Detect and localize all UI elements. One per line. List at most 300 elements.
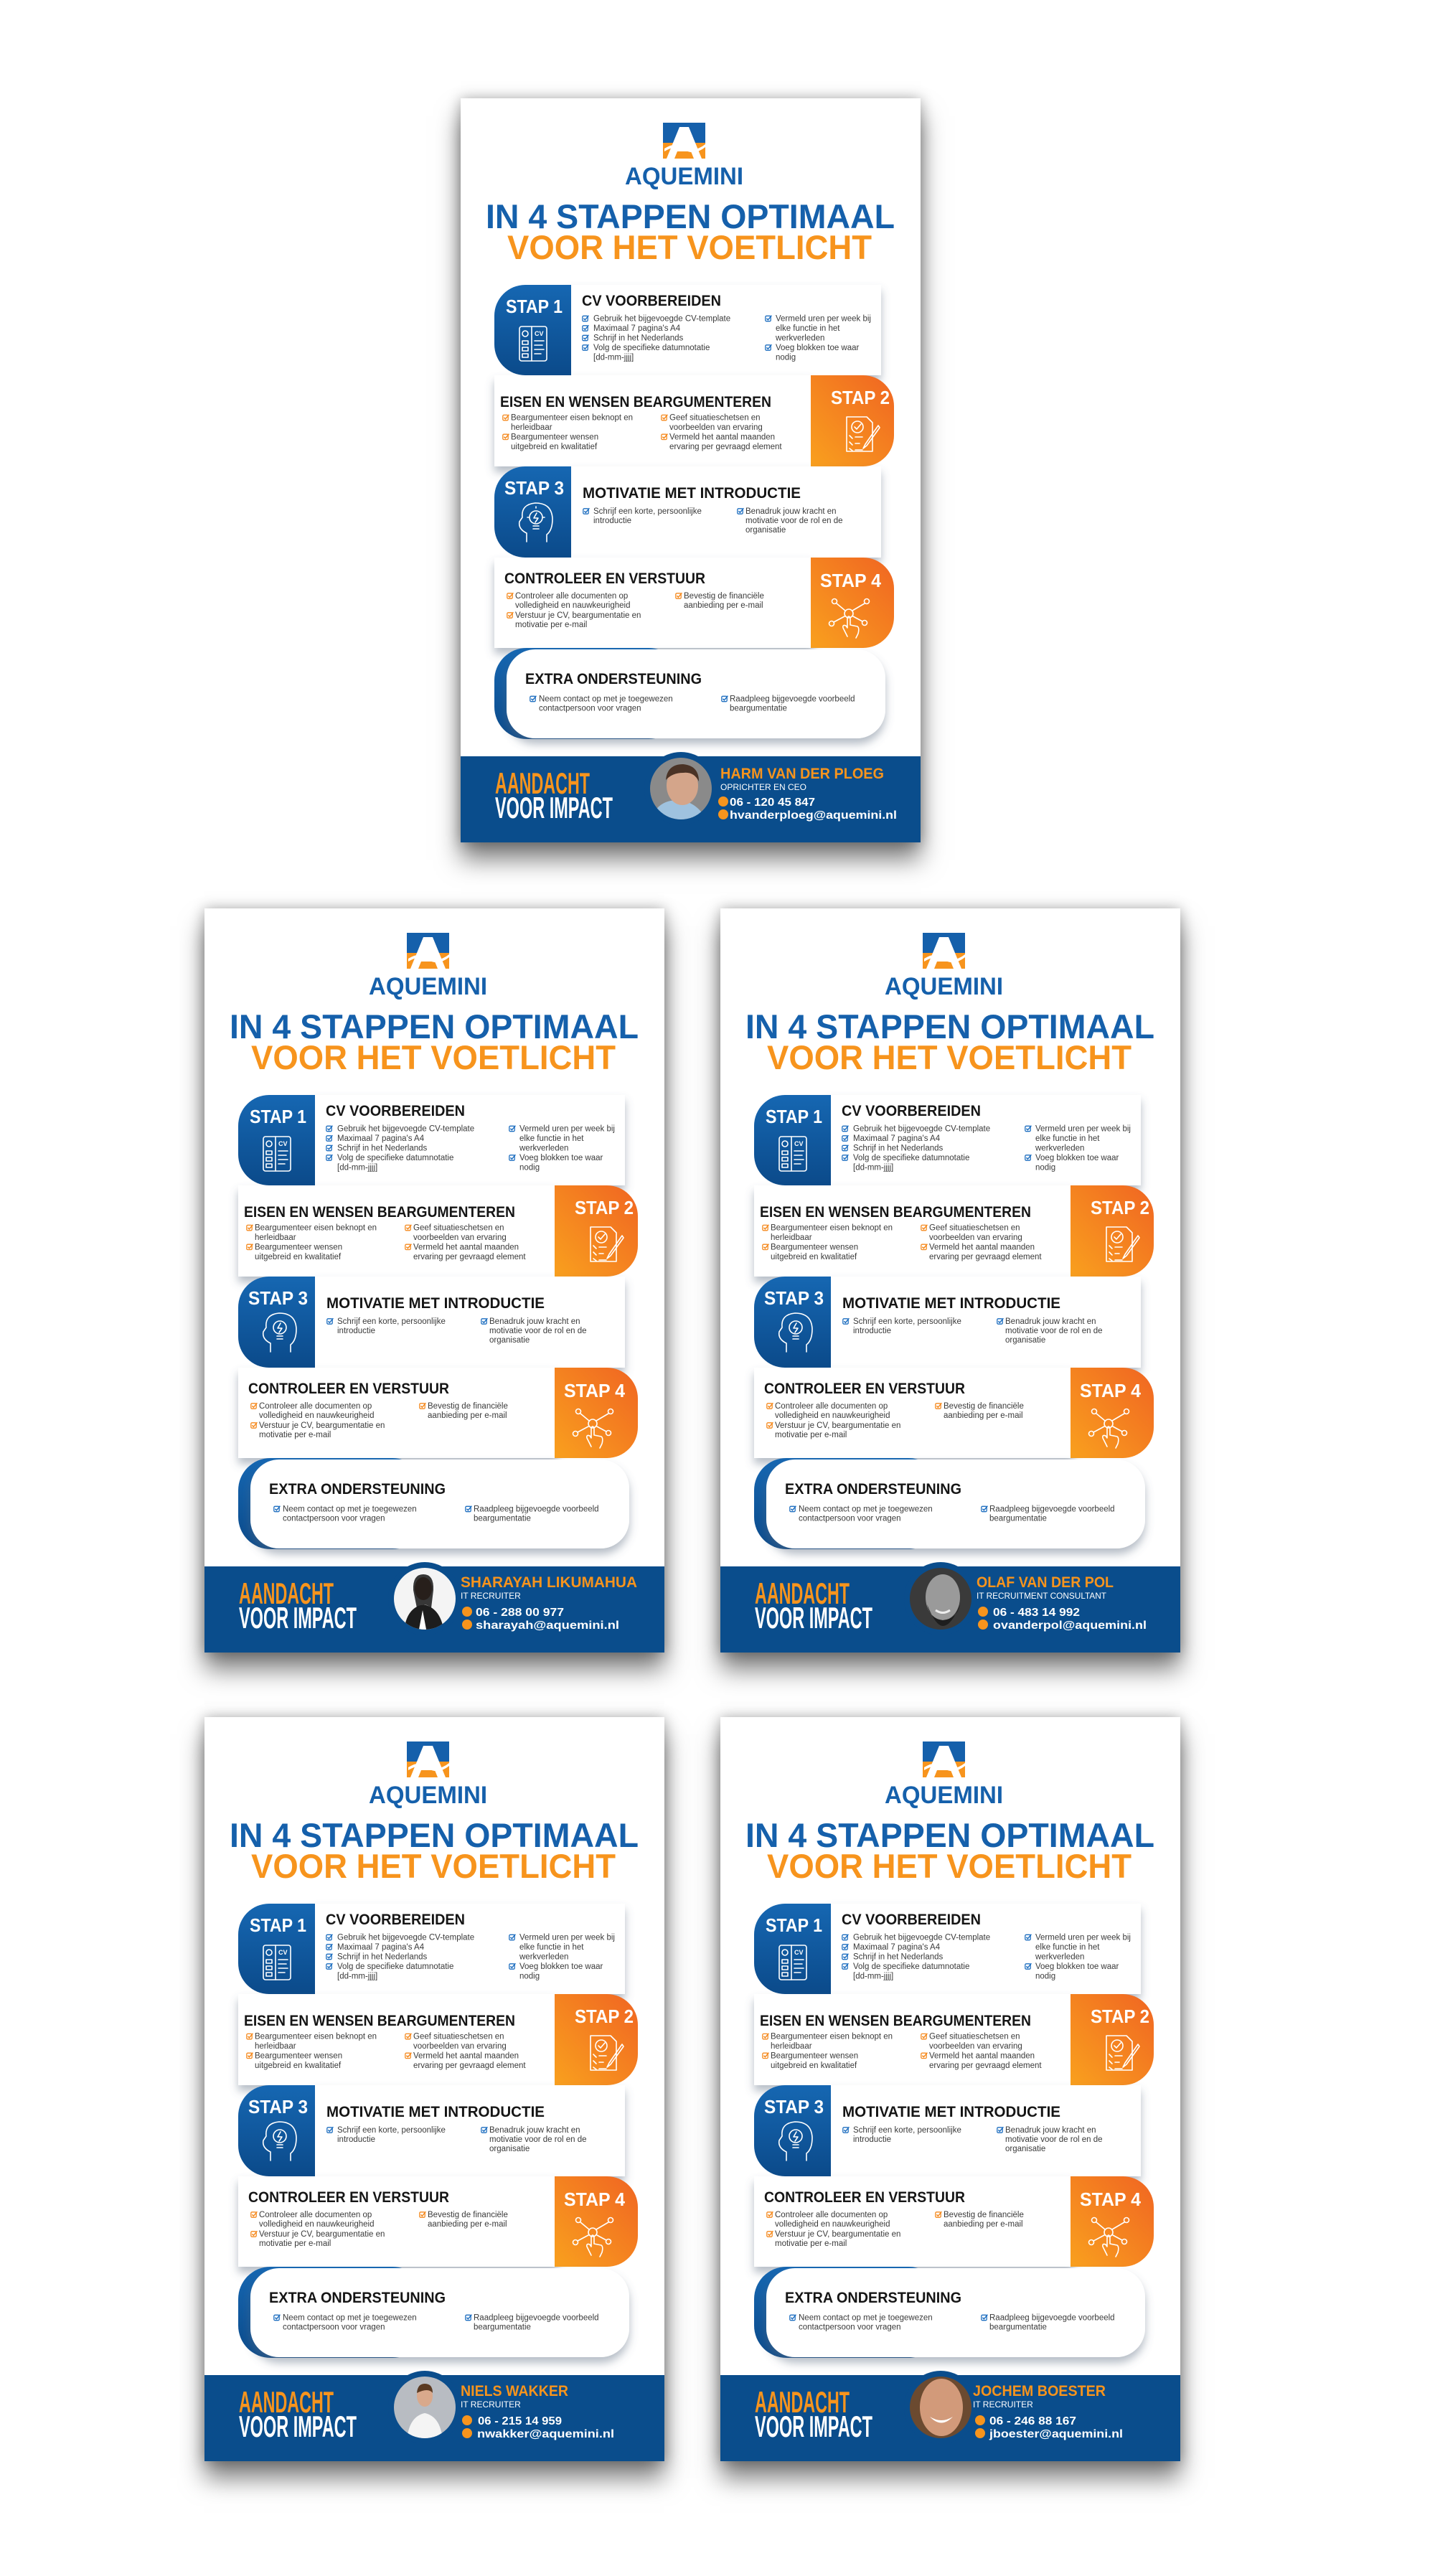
title: VOOR HET VOETLICHT <box>767 1847 1131 1885</box>
panel: stap 4: volledigheid en nauwkeurigheid <box>259 2220 374 2229</box>
panel: stap 2: Vermeld het aantal maanden <box>929 2051 1035 2060</box>
poster 5: Jochem Boester <box>720 1717 1180 2461</box>
panel: stap 2: ervaring per gevraagd element <box>929 2062 1042 2070</box>
panel: extra ondersteuning: EXTRA ONDERSTEUNING <box>269 1481 446 1498</box>
panel: stap 1: Vermeld uren per week bij <box>1035 1125 1131 1134</box>
panel: stap 3: MOTIVATIE MET INTRODUCTIE <box>842 2104 1060 2120</box>
panel: stap 2: herleidbaar <box>771 2042 812 2051</box>
panel: extra ondersteuning: contactpersoon voor vragen <box>539 705 641 713</box>
panel: stap 4: volledigheid en nauwkeurigheid <box>259 1411 374 1420</box>
footer <box>720 2371 1180 2461</box>
panel: stap 1: Gebruik het bijgevoegde CV-template <box>337 1933 474 1942</box>
footer: jboester@aquemini.nl <box>989 2428 1123 2440</box>
panel: stap 1: STAP 1 <box>766 1914 822 1936</box>
icon: cv: CV <box>535 330 544 337</box>
panel: stap 4: Verstuur je CV, beargumentatie en <box>775 1421 900 1430</box>
panel: stap 4: motivatie per e-mail <box>515 621 587 629</box>
panel: stap 2: Vermeld het aantal maanden <box>413 1243 519 1251</box>
icon: cv <box>519 326 547 361</box>
panel: stap 2: uitgebreid en kwalitatief <box>771 1253 857 1261</box>
footer: AANDACHT <box>239 2385 334 2419</box>
footer: AANDACHT <box>755 1576 850 1610</box>
panel: stap 2: ervaring per gevraagd element <box>669 443 782 451</box>
panel: stap 4: Controleer alle documenten op <box>259 1402 372 1411</box>
panel: stap 1: Voeg blokken toe waar <box>1035 1154 1119 1162</box>
footer: VOOR IMPACT <box>239 2410 357 2443</box>
panel: stap 3: STAP 3 <box>764 2096 824 2117</box>
panel: stap 4 <box>494 558 894 648</box>
panel: stap 4: Bevestig de financiële <box>684 592 764 601</box>
panel: stap 1: CV VOORBEREIDEN <box>842 1912 981 1928</box>
panel: stap 1: elke functie in het <box>519 1943 584 1952</box>
footer: 06 - 288 00 977 <box>476 1607 564 1619</box>
panel: stap 3 <box>494 466 881 558</box>
panel: stap 4: STAP 4 <box>820 570 882 591</box>
icon: head with lightbulb <box>263 2122 296 2161</box>
icon: network hand <box>1089 2217 1129 2257</box>
panel: stap 1: Schrijf in het Nederlands <box>337 1953 428 1962</box>
panel: stap 3: motivatie voor de rol en de <box>745 517 843 525</box>
panel: stap 4: CONTROLEER EN VERSTUUR <box>764 1381 965 1397</box>
panel: stap 4 <box>238 1368 638 1458</box>
panel: stap 2: Beargumenteer wensen <box>771 1243 858 1251</box>
panel: stap 2: Beargumenteer eisen beknopt en <box>511 414 633 423</box>
panel: stap 2: ervaring per gevraagd element <box>413 2062 526 2070</box>
icon: network hand <box>829 598 870 638</box>
panel: stap 4: motivatie per e-mail <box>259 2239 331 2248</box>
panel: stap 3: introductie <box>853 1327 891 1335</box>
panel: stap 1: Volg de specifieke datumnotatie <box>337 1154 453 1162</box>
panel: stap 1: elke functie in het <box>776 324 840 333</box>
panel: stap 4: STAP 4 <box>564 2189 626 2210</box>
icon: cv: CV <box>278 1140 288 1147</box>
title <box>745 1816 1154 1885</box>
panel: stap 3: Benadruk jouw kracht en <box>1005 2126 1096 2135</box>
icon: checklist <box>1106 1227 1139 1261</box>
panel: stap 2: herleidbaar <box>511 423 552 432</box>
panel: stap 2: Beargumenteer eisen beknopt en <box>771 2033 893 2041</box>
panel: stap 1: STAP 1 <box>766 1106 822 1127</box>
panel: stap 2: Geef situatieschetsen en <box>929 1224 1020 1233</box>
icon: head with lightbulb <box>779 1313 812 1352</box>
footer: 06 - 120 45 847 <box>730 796 815 809</box>
title: VOOR HET VOETLICHT <box>251 1038 616 1076</box>
panel: stap 1: Gebruik het bijgevoegde CV-template <box>853 1933 990 1942</box>
panel: stap 1: Voeg blokken toe waar <box>1035 1962 1119 1971</box>
panel: stap 2: EISEN EN WENSEN BEARGUMENTEREN <box>244 1204 515 1221</box>
panel: stap 3 <box>238 2085 625 2176</box>
panel: stap 4: Verstuur je CV, beargumentatie en <box>259 1421 385 1430</box>
footer: NIELS WAKKER <box>461 2383 568 2399</box>
panel: stap 3: MOTIVATIE MET INTRODUCTIE <box>583 485 801 502</box>
panel: stap 2 <box>754 1185 1154 1277</box>
panel: stap 2: herleidbaar <box>255 2042 296 2051</box>
panel: stap 1: Volg de specifieke datumnotatie <box>593 344 710 352</box>
panel: stap 3: STAP 3 <box>764 1287 824 1309</box>
title: IN 4 STAPPEN OPTIMAAL <box>745 1007 1154 1045</box>
icon: cv: CV <box>278 1949 288 1956</box>
logo text: AQUEMINI <box>885 973 1003 1000</box>
panel: extra ondersteuning <box>754 1458 1145 1549</box>
panel: stap 3 <box>754 2085 1141 2176</box>
panel: stap 3 <box>754 1277 1141 1368</box>
panel: stap 2: voorbeelden van ervaring <box>929 2042 1022 2051</box>
panel: stap 1: Volg de specifieke datumnotatie <box>853 1154 969 1162</box>
panel: stap 2: uitgebreid en kwalitatief <box>511 443 598 451</box>
panel: extra ondersteuning: Raadpleeg bijgevoegde voorbeeld <box>989 1505 1115 1514</box>
panel: stap 2: uitgebreid en kwalitatief <box>255 2062 342 2070</box>
panel: stap 2: Beargumenteer eisen beknopt en <box>255 2033 377 2041</box>
panel: stap 1: werkverleden <box>1035 1953 1084 1962</box>
panel: stap 1: Voeg blokken toe waar <box>519 1962 603 1971</box>
panel: stap 1: [dd-mm-jjjj] <box>853 1164 893 1172</box>
panel: stap 1: Voeg blokken toe waar <box>776 344 860 352</box>
panel: stap 3: Schrijf een korte, persoonlijke <box>593 507 702 516</box>
panel: extra ondersteuning <box>754 2267 1145 2358</box>
footer: OLAF VAN DER POL <box>977 1574 1114 1591</box>
panel: stap 1: CV VOORBEREIDEN <box>326 1103 465 1119</box>
panel: stap 4: aanbieding per e-mail <box>684 601 763 610</box>
panel: stap 1: [dd-mm-jjjj] <box>337 1164 377 1172</box>
panel: extra ondersteuning: beargumentatie <box>730 705 787 713</box>
panel: stap 1: Maximaal 7 pagina's A4 <box>853 1134 941 1143</box>
panel: extra ondersteuning: Raadpleeg bijgevoegde voorbeeld <box>730 695 855 703</box>
panel: stap 3: Benadruk jouw kracht en <box>489 2126 580 2135</box>
panel: stap 3: Schrijf een korte, persoonlijke <box>853 1317 961 1326</box>
panel: stap 4: Verstuur je CV, beargumentatie en <box>775 2230 900 2239</box>
panel: stap 3: organisatie <box>745 526 786 535</box>
panel: stap 3: MOTIVATIE MET INTRODUCTIE <box>842 1295 1060 1312</box>
icon: head with lightbulb <box>779 2122 812 2161</box>
logo text: AQUEMINI <box>885 1782 1003 1809</box>
panel: stap 1: nodig <box>1035 1972 1055 1980</box>
icon: network hand <box>573 1409 613 1448</box>
footer: SHARAYAH LIKUMAHUA <box>461 1574 637 1591</box>
photo <box>394 2377 456 2438</box>
panel: stap 4: Controleer alle documenten op <box>259 2211 372 2219</box>
icon: cv <box>779 1945 806 1980</box>
panel: stap 4 <box>754 1368 1154 1458</box>
panel: stap 1: elke functie in het <box>1035 1134 1100 1143</box>
panel: stap 4: Bevestig de financiële <box>944 1402 1024 1411</box>
panel: stap 1: Maximaal 7 pagina's A4 <box>853 1943 941 1952</box>
panel: stap 1: nodig <box>519 1164 540 1172</box>
panel: stap 2: herleidbaar <box>255 1233 296 1242</box>
panel: stap 1: elke functie in het <box>1035 1943 1100 1952</box>
footer <box>720 1562 1180 1653</box>
panel: stap 4 <box>238 2176 638 2267</box>
panel: stap 3: Schrijf een korte, persoonlijke <box>853 2126 961 2135</box>
panel: stap 2: Geef situatieschetsen en <box>929 2033 1020 2041</box>
panel: stap 3: introductie <box>593 517 631 525</box>
panel: stap 4: volledigheid en nauwkeurigheid <box>515 601 630 610</box>
panel: stap 1 <box>238 1095 625 1185</box>
panel: stap 2: uitgebreid en kwalitatief <box>771 2062 857 2070</box>
panel: stap 4: aanbieding per e-mail <box>944 1411 1023 1420</box>
panel: extra ondersteuning: beargumentatie <box>474 2323 531 2332</box>
footer <box>204 2371 664 2461</box>
panel: stap 1: werkverleden <box>1035 1144 1084 1152</box>
photo <box>394 1568 456 1630</box>
panel: stap 2: Beargumenteer wensen <box>255 1243 342 1251</box>
icon: cv: CV <box>794 1949 804 1956</box>
panel: stap 4: aanbieding per e-mail <box>428 1411 507 1420</box>
footer: VOOR IMPACT <box>239 1601 357 1635</box>
footer: HARM VAN DER PLOEG <box>720 766 884 782</box>
logo text: AQUEMINI <box>625 163 743 190</box>
panel: stap 1: [dd-mm-jjjj] <box>593 353 634 362</box>
panel: extra ondersteuning: Neem contact op met je toegewezen <box>539 695 673 703</box>
panel: stap 2: EISEN EN WENSEN BEARGUMENTEREN <box>500 394 771 410</box>
footer: VOOR IMPACT <box>755 2410 872 2443</box>
panel: stap 1: STAP 1 <box>250 1106 306 1127</box>
panel: stap 1: Gebruik het bijgevoegde CV-template <box>853 1125 990 1134</box>
panel: stap 2: ervaring per gevraagd element <box>929 1253 1042 1261</box>
panel: extra ondersteuning: contactpersoon voor vragen <box>283 2323 385 2332</box>
panel: stap 4: STAP 4 <box>1080 1380 1142 1401</box>
panel: stap 2: herleidbaar <box>771 1233 812 1242</box>
panel: stap 2: voorbeelden van ervaring <box>929 1233 1022 1242</box>
footer: 06 - 246 88 167 <box>989 2415 1076 2427</box>
title <box>230 1007 639 1076</box>
panel: stap 3: motivatie voor de rol en de <box>1005 2135 1103 2144</box>
logo text: AQUEMINI <box>369 1782 487 1809</box>
panel: stap 1: nodig <box>519 1972 540 1980</box>
icon: cv <box>263 1945 291 1980</box>
panel: stap 3: STAP 3 <box>248 1287 308 1309</box>
panel: extra ondersteuning: beargumentatie <box>989 1514 1047 1523</box>
panel: extra ondersteuning: Raadpleeg bijgevoegde voorbeeld <box>474 2313 599 2322</box>
panel: stap 3: introductie <box>337 2135 375 2144</box>
panel: stap 3: Benadruk jouw kracht en <box>1005 1317 1096 1326</box>
panel: stap 4: CONTROLEER EN VERSTUUR <box>248 2189 449 2206</box>
icon: checklist <box>1106 2036 1139 2070</box>
panel: stap 1: [dd-mm-jjjj] <box>337 1972 377 1980</box>
panel: stap 1: nodig <box>1035 1164 1055 1172</box>
footer: VOOR IMPACT <box>495 791 613 824</box>
footer: IT RECRUITER <box>461 2399 521 2410</box>
panel: extra ondersteuning: Neem contact op met je toegewezen <box>283 1505 417 1514</box>
panel: stap 3: STAP 3 <box>248 2096 308 2117</box>
photo <box>650 758 712 819</box>
panel: stap 4: motivatie per e-mail <box>775 2239 847 2248</box>
panel: stap 1: werkverleden <box>775 334 824 343</box>
panel: stap 1: Vermeld uren per week bij <box>519 1125 615 1134</box>
panel: stap 2: Beargumenteer wensen <box>771 2051 858 2060</box>
panel: stap 2: Beargumenteer wensen <box>511 433 598 441</box>
panel: extra ondersteuning <box>494 648 885 739</box>
panel: stap 3: organisatie <box>489 2145 530 2153</box>
panel: stap 1 <box>494 285 881 375</box>
icon: cv: CV <box>794 1140 804 1147</box>
title <box>486 197 895 266</box>
icon: head with lightbulb <box>263 1313 296 1352</box>
poster 2: Sharayah Likumahua <box>204 908 664 1653</box>
panel: stap 4: motivatie per e-mail <box>775 1431 847 1439</box>
panel: stap 3: organisatie <box>489 1336 530 1345</box>
panel: stap 4: CONTROLEER EN VERSTUUR <box>248 1381 449 1397</box>
footer: IT RECRUITMENT CONSULTANT <box>977 1591 1107 1601</box>
panel: stap 4 <box>754 2176 1154 2267</box>
title: IN 4 STAPPEN OPTIMAAL <box>230 1816 639 1854</box>
panel: stap 2: Vermeld het aantal maanden <box>929 1243 1035 1251</box>
panel: stap 2: ervaring per gevraagd element <box>413 1253 526 1261</box>
panel: stap 4: Verstuur je CV, beargumentatie en <box>515 611 641 620</box>
panel: stap 1: Voeg blokken toe waar <box>519 1154 603 1162</box>
panel: stap 3: motivatie voor de rol en de <box>489 2135 587 2144</box>
panel: stap 4: Bevestig de financiële <box>428 2211 508 2219</box>
panel: stap 4: volledigheid en nauwkeurigheid <box>775 2220 890 2229</box>
panel: extra ondersteuning: Raadpleeg bijgevoegde voorbeeld <box>474 1505 599 1514</box>
panel: stap 4: motivatie per e-mail <box>259 1431 331 1439</box>
title: IN 4 STAPPEN OPTIMAAL <box>745 1816 1154 1854</box>
panel: stap 4: CONTROLEER EN VERSTUUR <box>504 570 705 587</box>
panel: extra ondersteuning: Neem contact op met je toegewezen <box>283 2313 417 2322</box>
panel: extra ondersteuning: Neem contact op met je toegewezen <box>799 2313 933 2322</box>
logo icon <box>923 933 965 969</box>
panel: stap 1: Gebruik het bijgevoegde CV-template <box>337 1125 474 1134</box>
panel: stap 4: Controleer alle documenten op <box>775 1402 888 1411</box>
panel: extra ondersteuning <box>238 2267 629 2358</box>
panel: stap 2: voorbeelden van ervaring <box>413 2042 507 2051</box>
panel: stap 1: CV VOORBEREIDEN <box>582 293 721 309</box>
panel: stap 1: Maximaal 7 pagina's A4 <box>337 1943 425 1952</box>
panel: stap 1: Volg de specifieke datumnotatie <box>337 1962 453 1971</box>
panel: stap 2 <box>754 1994 1154 2085</box>
panel: stap 2: Vermeld het aantal maanden <box>669 433 775 441</box>
panel: stap 1: Volg de specifieke datumnotatie <box>853 1962 969 1971</box>
panel: stap 1: Maximaal 7 pagina's A4 <box>337 1134 425 1143</box>
footer <box>461 752 921 842</box>
panel: stap 3: introductie <box>337 1327 375 1335</box>
icon: network hand <box>573 2217 613 2257</box>
panel: stap 1 <box>754 1095 1141 1185</box>
panel: stap 3: Benadruk jouw kracht en <box>489 1317 580 1326</box>
icon: cv <box>779 1137 806 1171</box>
panel: stap 4: volledigheid en nauwkeurigheid <box>775 1411 890 1420</box>
panel: extra ondersteuning: EXTRA ONDERSTEUNING <box>525 671 702 687</box>
icon: head with lightbulb <box>519 503 552 542</box>
title: VOOR HET VOETLICHT <box>251 1847 616 1885</box>
panel: stap 3: organisatie <box>1005 1336 1045 1345</box>
icon: network hand <box>1089 1409 1129 1448</box>
footer: hvanderploeg@aquemini.nl <box>730 809 897 822</box>
photo <box>910 1568 971 1630</box>
title: VOOR HET VOETLICHT <box>507 228 872 266</box>
footer: JOCHEM BOESTER <box>973 2383 1106 2399</box>
panel: stap 2: uitgebreid en kwalitatief <box>255 1253 342 1261</box>
footer: IT RECRUITER <box>973 2399 1033 2410</box>
title <box>745 1007 1154 1076</box>
panel: stap 4: Bevestig de financiële <box>428 1402 508 1411</box>
footer: nwakker@aquemini.nl <box>477 2428 614 2440</box>
photo <box>910 2377 971 2438</box>
footer: 06 - 215 14 959 <box>478 2415 562 2427</box>
panel: extra ondersteuning: contactpersoon voor vragen <box>799 2323 901 2332</box>
title: IN 4 STAPPEN OPTIMAAL <box>230 1007 639 1045</box>
logo icon <box>663 123 705 159</box>
footer: OPRICHTER EN CEO <box>720 782 806 792</box>
panel: stap 1: Schrijf in het Nederlands <box>853 1953 944 1962</box>
panel: stap 1: nodig <box>776 353 796 362</box>
panel: extra ondersteuning: Neem contact op met je toegewezen <box>799 1505 933 1514</box>
panel: stap 1: Vermeld uren per week bij <box>1035 1933 1131 1942</box>
logo icon <box>407 933 449 969</box>
panel: stap 3: Schrijf een korte, persoonlijke <box>337 1317 446 1326</box>
panel: stap 2: STAP 2 <box>575 1197 634 1218</box>
panel: stap 1: STAP 1 <box>250 1914 306 1936</box>
panel: stap 2: STAP 2 <box>831 387 890 408</box>
panel: stap 3: STAP 3 <box>504 477 564 499</box>
panel: stap 1 <box>238 1904 625 1994</box>
panel: extra ondersteuning: beargumentatie <box>989 2323 1047 2332</box>
panel: stap 2: Beargumenteer wensen <box>255 2051 342 2060</box>
icon: checklist <box>591 1227 624 1261</box>
panel: extra ondersteuning: EXTRA ONDERSTEUNING <box>785 1481 961 1498</box>
poster 1: Harm van der Ploeg <box>461 98 921 842</box>
panel: stap 1: Schrijf in het Nederlands <box>853 1144 944 1152</box>
panel: stap 3: MOTIVATIE MET INTRODUCTIE <box>326 1295 545 1312</box>
title <box>230 1816 639 1885</box>
panel: stap 4: CONTROLEER EN VERSTUUR <box>764 2189 965 2206</box>
panel: stap 1: Maximaal 7 pagina's A4 <box>593 324 681 333</box>
panel: stap 1: CV VOORBEREIDEN <box>326 1912 465 1928</box>
footer <box>204 1562 664 1653</box>
panel: stap 2: Geef situatieschetsen en <box>413 2033 504 2041</box>
logo icon <box>407 1741 449 1777</box>
footer: 06 - 483 14 992 <box>993 1607 1080 1619</box>
title: VOOR HET VOETLICHT <box>767 1038 1131 1076</box>
panel: stap 4: Bevestig de financiële <box>944 2211 1024 2219</box>
panel: stap 3: Schrijf een korte, persoonlijke <box>337 2126 446 2135</box>
panel: extra ondersteuning: contactpersoon voor vragen <box>283 1514 385 1523</box>
panel: stap 1: STAP 1 <box>506 296 563 317</box>
footer: AANDACHT <box>495 766 590 800</box>
panel: stap 1: Schrijf in het Nederlands <box>337 1144 428 1152</box>
panel: stap 3: motivatie voor de rol en de <box>489 1327 587 1335</box>
footer: sharayah@aquemini.nl <box>476 1620 619 1632</box>
poster 4: Niels Wakker <box>204 1717 664 2461</box>
panel: stap 2: EISEN EN WENSEN BEARGUMENTEREN <box>244 2013 515 2029</box>
panel: extra ondersteuning: EXTRA ONDERSTEUNING <box>785 2290 961 2306</box>
panel: stap 3: organisatie <box>1005 2145 1045 2153</box>
panel: stap 1 <box>754 1904 1141 1994</box>
panel: stap 1: werkverleden <box>519 1953 568 1962</box>
title: IN 4 STAPPEN OPTIMAAL <box>486 197 895 235</box>
panel: stap 3: Benadruk jouw kracht en <box>745 507 837 516</box>
panel: extra ondersteuning: EXTRA ONDERSTEUNING <box>269 2290 446 2306</box>
panel: stap 2 <box>238 1185 638 1277</box>
panel: stap 2: EISEN EN WENSEN BEARGUMENTEREN <box>760 2013 1031 2029</box>
panel: stap 1: Gebruik het bijgevoegde CV-template <box>593 314 730 323</box>
panel: stap 3: introductie <box>853 2135 891 2144</box>
panel: stap 1: [dd-mm-jjjj] <box>853 1972 893 1980</box>
panel: stap 3: MOTIVATIE MET INTRODUCTIE <box>326 2104 545 2120</box>
panel: stap 2: EISEN EN WENSEN BEARGUMENTEREN <box>760 1204 1031 1221</box>
footer: VOOR IMPACT <box>755 1601 872 1635</box>
panel: stap 2 <box>238 1994 638 2085</box>
icon: checklist <box>847 417 880 451</box>
panel: stap 2: STAP 2 <box>1091 2006 1149 2027</box>
footer: ovanderpol@aquemini.nl <box>993 1620 1147 1632</box>
panel: stap 4: Controleer alle documenten op <box>515 592 628 601</box>
panel: stap 3: motivatie voor de rol en de <box>1005 1327 1103 1335</box>
panel: stap 2: Beargumenteer eisen beknopt en <box>771 1224 893 1233</box>
panel: stap 2: Vermeld het aantal maanden <box>413 2051 519 2060</box>
footer: IT RECRUITER <box>461 1591 521 1601</box>
panel: extra ondersteuning: Raadpleeg bijgevoegde voorbeeld <box>989 2313 1115 2322</box>
panel: stap 4: aanbieding per e-mail <box>428 2220 507 2229</box>
